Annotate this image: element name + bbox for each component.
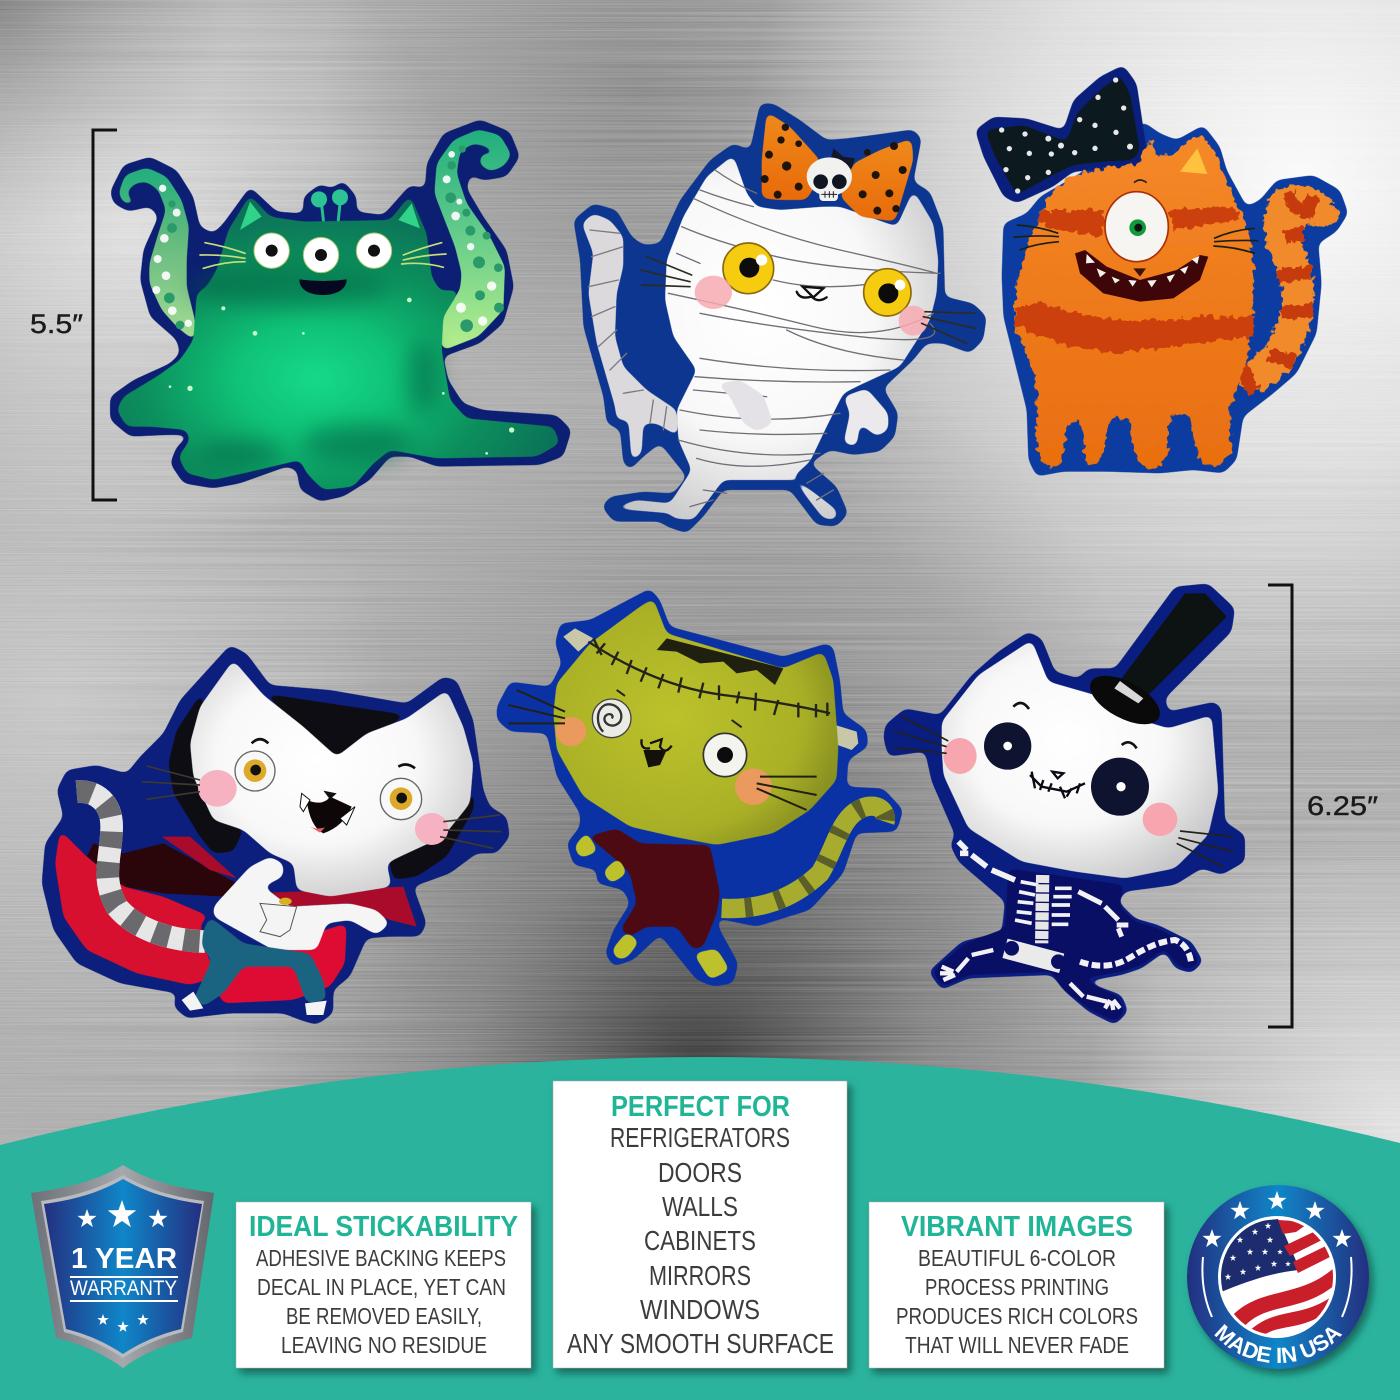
sparkles — [169, 298, 514, 455]
body — [610, 155, 938, 520]
skull — [807, 148, 855, 201]
trousers — [193, 917, 327, 1007]
surface list — [567, 1122, 834, 1359]
dimension: 5.5 inch: 5.5″ — [30, 309, 83, 339]
sticker: vampire cat — [42, 645, 510, 1025]
bow outline — [975, 65, 1147, 203]
orange bow — [761, 112, 913, 222]
sticker: Frankenstein cat — [497, 588, 903, 987]
antennae — [311, 189, 348, 220]
flag — [1218, 1216, 1336, 1342]
sticker: orange one-eyed cat — [975, 65, 1348, 477]
panel: perfect for — [553, 1081, 847, 1368]
stitches — [588, 638, 830, 717]
teal footer band — [0, 1057, 1400, 1400]
tentacle spots — [152, 145, 504, 332]
shield text: 1 YEAR — [71, 1243, 177, 1275]
mouth — [1075, 250, 1208, 302]
left tentacle — [118, 167, 195, 342]
shield text — [70, 1243, 178, 1302]
skeleton bones — [940, 842, 1191, 1010]
dimension: 6.25 inch: 6.25″ — [1307, 791, 1379, 821]
left arm — [717, 380, 773, 432]
made in USA badge — [1186, 1185, 1378, 1379]
tail — [1238, 183, 1340, 392]
right arm — [843, 388, 888, 447]
hair — [657, 638, 783, 685]
right tentacle — [434, 129, 512, 351]
badge stars — [1202, 1191, 1352, 1247]
bow dots — [999, 77, 1133, 194]
body copy: BEAUTIFUL 6-COLOR — [918, 1245, 1116, 1271]
tail — [722, 806, 885, 909]
body copy — [256, 1245, 506, 1358]
feet — [182, 992, 327, 1015]
surface list: WALLS — [662, 1191, 738, 1222]
cape collar — [162, 837, 417, 927]
blush — [198, 770, 448, 845]
three eyes — [254, 233, 392, 273]
body copy — [896, 1245, 1138, 1358]
ears — [240, 202, 420, 230]
body copy: BE REMOVED EASILY, — [286, 1303, 482, 1329]
pelvis holes — [1004, 941, 1066, 969]
heading: VIBRANT IMAGES — [901, 1211, 1133, 1243]
cape inner — [63, 837, 257, 897]
body — [1013, 133, 1253, 470]
body copy: PROCESS PRINTING — [925, 1274, 1109, 1300]
dark nebula patches — [190, 267, 440, 467]
sticker: green alien cat — [110, 119, 572, 502]
warranty shield badge — [31, 1165, 214, 1368]
round eye — [617, 690, 747, 777]
body — [117, 195, 560, 490]
heading: IDEAL STICKABILITY — [249, 1211, 518, 1243]
dimension: 5.5 inch — [30, 130, 117, 500]
whiskers — [1013, 225, 1258, 253]
eyes — [235, 739, 422, 820]
swirl eye — [592, 699, 631, 738]
shield stars — [77, 1200, 168, 1332]
eye — [1105, 180, 1168, 262]
side arcs — [1202, 1257, 1352, 1317]
heading: PERFECT FOR — [611, 1091, 790, 1123]
body copy: PRODUCES RICH COLORS — [896, 1303, 1138, 1329]
surface list: DOORS — [658, 1157, 742, 1188]
head — [942, 640, 1218, 878]
surface list: ANY SMOOTH SURFACE — [567, 1328, 834, 1359]
badge lettering: MADE IN USA — [1214, 1324, 1342, 1363]
whiskers — [893, 717, 1233, 867]
bandage lines — [668, 170, 940, 507]
mouth — [300, 791, 355, 833]
eyes — [723, 243, 911, 316]
body copy: DECAL IN PLACE, YET CAN — [257, 1274, 506, 1300]
stitched mouth — [1030, 772, 1085, 798]
black bow — [985, 75, 1140, 195]
cape bottom — [203, 923, 347, 1003]
blush — [943, 738, 1177, 836]
ear — [1180, 148, 1207, 174]
mouth — [299, 279, 347, 295]
panel: vibrant images — [869, 1202, 1164, 1368]
dimension: 6.25 inch — [1268, 585, 1379, 1027]
tail wraps — [588, 230, 667, 430]
black hair — [168, 690, 477, 880]
eyes — [984, 703, 1149, 816]
surface list: WINDOWS — [640, 1294, 760, 1325]
brooch and jabot — [260, 898, 297, 937]
striped tail — [77, 792, 205, 942]
blush — [695, 276, 928, 336]
surface list: MIRRORS — [649, 1260, 751, 1291]
nose and mouth — [641, 739, 672, 767]
whiskers — [200, 243, 446, 268]
blush — [556, 717, 772, 805]
surface list: CABINETS — [644, 1225, 756, 1256]
lower body — [932, 868, 1200, 1022]
surface list: REFRIGERATORS — [610, 1122, 790, 1153]
whiskers — [508, 690, 817, 810]
nose and whiskers — [640, 257, 975, 343]
cape left — [55, 830, 217, 985]
shield text: WARRANTY — [70, 1277, 177, 1300]
sticker: skeleton cat with top hat — [883, 583, 1245, 1025]
top hat — [1083, 593, 1227, 734]
bolts — [563, 628, 858, 750]
paws — [574, 832, 730, 980]
body copy: LEAVING NO RESIDUE — [281, 1332, 487, 1358]
head — [553, 598, 838, 845]
sticker: mummy cat with bow — [573, 103, 987, 533]
panel: ideal stickability — [236, 1202, 531, 1368]
tail — [582, 213, 678, 462]
suit — [587, 828, 720, 950]
head — [190, 660, 473, 897]
body copy: THAT WILL NEVER FADE — [905, 1332, 1129, 1358]
body copy: ADHESIVE BACKING KEEPS — [256, 1245, 506, 1271]
whiskers — [142, 766, 502, 848]
torso and arms — [213, 857, 390, 950]
